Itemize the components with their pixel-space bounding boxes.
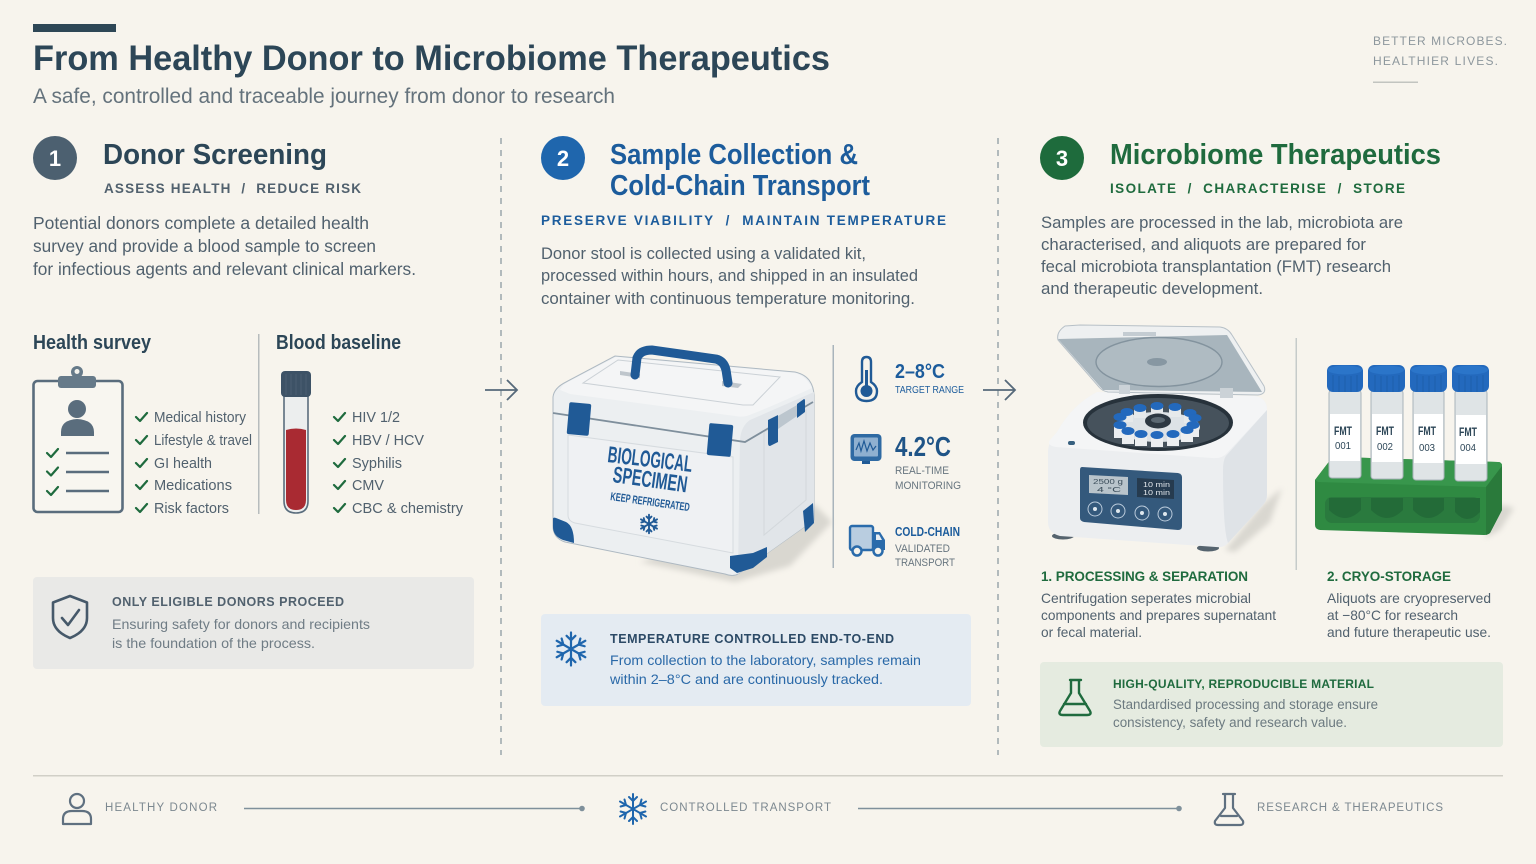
illustration: cooler box: KEEP REFRIGERATED	[610, 491, 690, 514]
callout: temperature controlled: From collection to the laboratory, samples remain	[610, 652, 921, 668]
step badge 1: 1	[49, 146, 61, 171]
stat: cold-chain	[895, 525, 960, 569]
stat: cold-chain: VALIDATED	[895, 543, 950, 555]
subtitle: A safe, controlled and traceable journey from donor to research	[33, 85, 615, 108]
rotor tubes front row	[1114, 421, 1200, 447]
callout: temperature controlled: within 2–8°C and are continuously tracked.	[609, 671, 883, 687]
description: sample collection	[541, 245, 918, 308]
icon: donor	[63, 794, 91, 824]
connector 2	[858, 806, 1182, 811]
tube FMT 004: 004	[1460, 442, 1476, 454]
tagline: HEALTHIER LIVES.	[1373, 54, 1498, 68]
tube FMT 003: 003	[1419, 442, 1435, 454]
checklist: blood baseline: HBV / HCV	[352, 433, 424, 449]
callout: high-quality material	[1040, 662, 1503, 747]
checklist: blood baseline	[334, 410, 464, 517]
text: cryo-storage: 2. CRYO-STORAGE	[1327, 569, 1451, 584]
description: therapeutics: fecal microbiota transplantation (FMT) research	[1041, 258, 1391, 276]
panel divider 2	[997, 138, 999, 755]
stat: real-time monitoring: 4.2°C	[895, 431, 951, 462]
stat: target range: TARGET RANGE	[895, 384, 964, 396]
description: donor screening: Potential donors complete a detailed health	[33, 213, 369, 233]
callout: eligible donors: ONLY ELIGIBLE DONORS PROCEED	[112, 595, 344, 609]
description: sample collection: Donor stool is collected using a validated kit,	[541, 245, 866, 263]
stat: real-time monitoring: REAL-TIME	[895, 465, 949, 477]
checklist: health survey	[136, 410, 252, 517]
rotor tubes back row	[1114, 402, 1202, 423]
checklist: health survey: GI health	[154, 456, 212, 472]
callout: high-quality material: HIGH-QUALITY, REPRODUCIBLE MATERIAL	[1113, 677, 1374, 691]
description: donor screening: for infectious agents and relevant clinical markers.	[33, 259, 416, 279]
callout: high-quality material: consistency, safety and research value.	[1113, 715, 1347, 730]
step badge 3: 3	[1056, 146, 1068, 171]
label: healthy donor: HEALTHY DONOR	[105, 802, 217, 814]
heading: donor screening: Donor Screening	[103, 139, 327, 171]
description: therapeutics	[1041, 214, 1403, 298]
description: sample collection: processed within hours, and shipped in an insulated	[541, 267, 918, 285]
callout: temperature controlled	[541, 614, 971, 706]
illustration: FMT tube rack	[1315, 365, 1514, 538]
illustration: cooler box: BIOLOGICAL	[606, 441, 694, 477]
checklist: blood baseline: CMV	[352, 478, 384, 494]
tagline	[1373, 34, 1507, 83]
callout: temperature controlled: TEMPERATURE CONTROLLED END-TO-END	[610, 632, 894, 646]
icon: monitor	[850, 434, 882, 464]
callout: high-quality material: Standardised processing and storage ensure	[1113, 697, 1378, 712]
footer timeline	[33, 775, 1503, 825]
tube FMT 002: FMT	[1376, 426, 1394, 438]
icon: truck	[850, 526, 885, 556]
callout: eligible donors: Ensuring safety for donors and recipients	[112, 616, 370, 632]
panel: donor screening	[33, 136, 474, 669]
text: processing and separation: Centrifugation seperates microbial	[1041, 590, 1251, 606]
stat: real-time monitoring	[895, 431, 961, 492]
description: therapeutics: Samples are processed in the lab, microbiota are	[1041, 214, 1403, 232]
text: processing and separation: 1. PROCESSING & SEPARATION	[1041, 569, 1248, 584]
callout: eligible donors	[33, 577, 474, 669]
text: processing and separation	[1041, 569, 1276, 640]
title: From Healthy Donor to Microbiome Therapeutics	[33, 39, 830, 78]
icon: blood tube	[281, 371, 311, 513]
tube FMT 001: 001	[1335, 440, 1351, 452]
illustration: centrifuge: 10 min	[1143, 482, 1170, 489]
arrow: step 1 to 2	[485, 380, 517, 400]
heading: health survey: Health survey	[33, 332, 152, 354]
text: cryo-storage: Aliquots are cryopreserved	[1327, 590, 1491, 606]
heading: microbiome therapeutics: Microbiome Therapeutics	[1110, 139, 1441, 171]
text: processing and separation: or fecal material.	[1041, 624, 1142, 640]
subheading: preserve viability: PRESERVE VIABILITY / MAINTAIN TEMPERATURE	[541, 213, 946, 228]
illustration: centrifuge: 2500 g	[1093, 479, 1123, 486]
tube FMT 004: FMT	[1459, 427, 1477, 439]
illustration: cooler box	[553, 350, 832, 582]
checklist: health survey: Risk factors	[154, 501, 229, 517]
callout: eligible donors: is the foundation of the process.	[112, 635, 315, 651]
stat: target range	[895, 361, 964, 396]
description: therapeutics: and therapeutic development.	[1041, 280, 1263, 298]
tube FMT 002: 002	[1377, 441, 1393, 453]
checklist: health survey: Medical history	[154, 410, 247, 426]
illustration: cooler box: SPECIMEN	[611, 461, 689, 497]
lid	[1058, 325, 1265, 395]
checklist: blood baseline: CBC & chemistry	[352, 501, 464, 517]
text: cryo-storage: at −80°C for research	[1327, 607, 1458, 623]
icon: snowflake	[557, 632, 585, 666]
icon: thermometer	[856, 357, 877, 401]
step badge 2: 2	[557, 146, 569, 171]
step badge 2	[541, 136, 585, 180]
subheading: assess health: ASSESS HEALTH / REDUCE RISK	[104, 181, 361, 196]
tube FMT 003: FMT	[1418, 426, 1436, 438]
tube FMT 002	[1368, 365, 1405, 479]
description: donor screening: survey and provide a blood sample to screen	[33, 236, 376, 256]
panel: sample collection	[541, 136, 971, 706]
connector 1	[244, 806, 585, 811]
subheading: isolate: ISOLATE / CHARACTERISE / STORE	[1110, 181, 1405, 196]
checklist: blood baseline: HIV 1/2	[352, 410, 400, 426]
description: donor screening	[33, 213, 416, 279]
heading: sample collection: Sample Collection &	[610, 139, 858, 171]
step badge 1	[33, 136, 77, 180]
illustration: centrifuge	[1048, 325, 1282, 552]
text: cryo-storage: and future therapeutic use.	[1327, 624, 1491, 640]
stat: target range: 2–8°C	[895, 361, 945, 383]
tube FMT 001	[1327, 365, 1363, 478]
checklist: blood baseline: Syphilis	[352, 456, 402, 472]
stat: cold-chain: COLD-CHAIN	[895, 525, 960, 539]
icon: snowflake	[620, 794, 646, 824]
panel: microbiome therapeutics	[1040, 136, 1514, 747]
tube FMT 004	[1452, 365, 1489, 481]
illustration: centrifuge: 4 °C	[1097, 486, 1121, 494]
tube FMT 001: FMT	[1334, 426, 1352, 438]
icon: shield	[53, 596, 87, 638]
heading: sample collection: Cold-Chain Transport	[610, 170, 870, 202]
tube FMT 003	[1410, 365, 1447, 480]
label: research and therapeutics: RESEARCH & THERAPEUTICS	[1257, 802, 1443, 814]
illustration: centrifuge: 10 min	[1143, 490, 1170, 497]
heading: blood baseline: Blood baseline	[276, 332, 401, 354]
checklist: health survey: Medications	[154, 478, 232, 494]
checklist: health survey: Lifestyle & travel	[154, 433, 252, 449]
tagline: BETTER MICROBES.	[1373, 34, 1507, 48]
icon: flask	[1059, 680, 1091, 715]
icon: research flask	[1215, 794, 1243, 825]
step badge 3	[1040, 136, 1084, 180]
text: cryo-storage	[1327, 569, 1491, 640]
description: sample collection: container with continuous temperature monitoring.	[541, 290, 915, 308]
icon: clipboard	[34, 366, 122, 512]
description: therapeutics: characterised, and aliquots are prepared for	[1041, 236, 1367, 254]
stat: cold-chain: TRANSPORT	[895, 557, 955, 569]
stat: real-time monitoring: MONITORING	[895, 480, 961, 492]
text: processing and separation: components and prepares supernatant	[1041, 607, 1276, 623]
header accent bar	[33, 24, 116, 32]
panel divider 1	[500, 138, 502, 755]
heading: sample collection	[610, 139, 870, 202]
arrow: step 2 to 3	[983, 380, 1015, 400]
label: controlled transport: CONTROLLED TRANSPORT	[660, 802, 831, 814]
